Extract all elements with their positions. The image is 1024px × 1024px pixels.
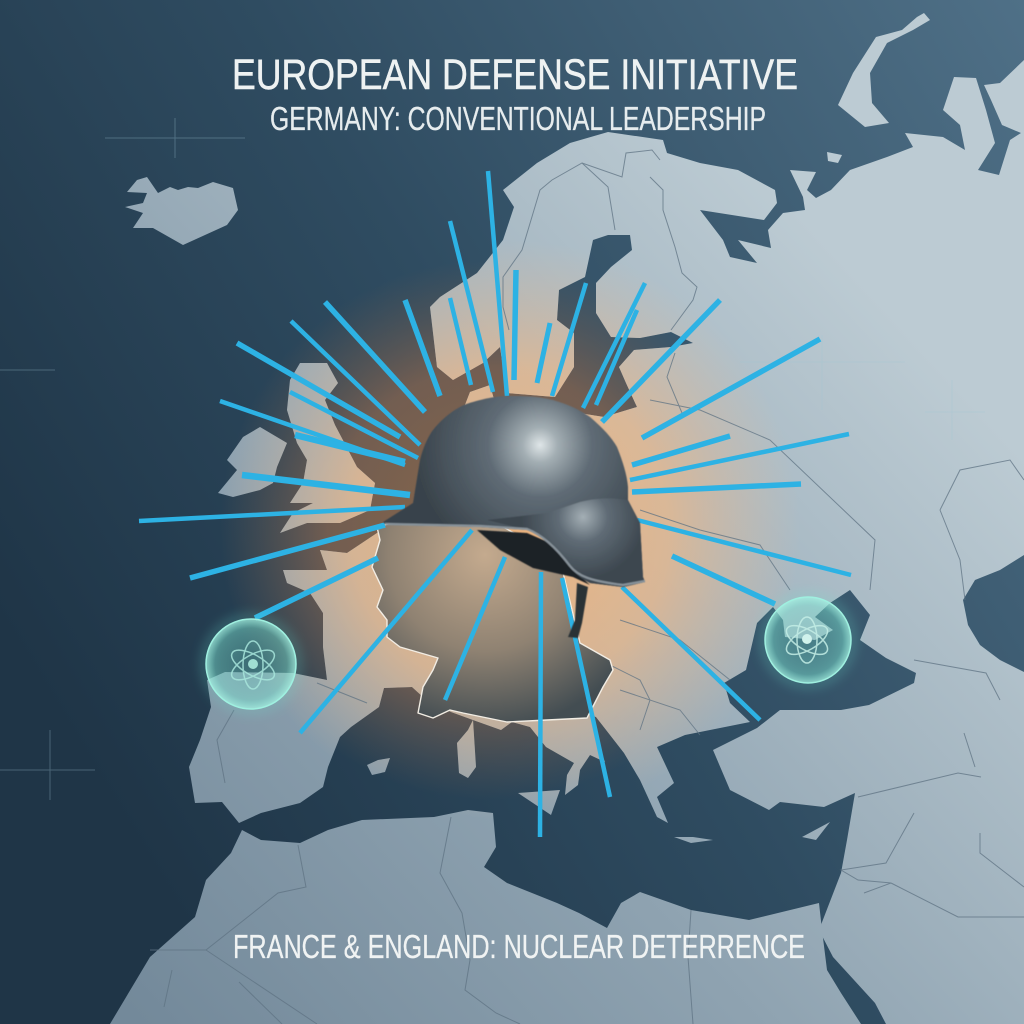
warm glow over the sea — [220, 260, 760, 800]
icon: nuclear orb east — [764, 596, 852, 684]
subtitle: GERMANY: CONVENTIONAL LEADERSHIP — [270, 100, 766, 137]
blue radiating lines — [139, 171, 851, 837]
country borders — [150, 150, 1024, 1024]
helmet inner shadow — [477, 530, 590, 585]
icon: nuclear orb west — [205, 618, 297, 710]
helmet brim highlight — [385, 524, 645, 585]
decorative crosshair marks — [0, 118, 985, 800]
helmet strap — [568, 583, 588, 638]
bottom caption: FRANCE & ENGLAND: NUCLEAR DETERRENCE — [233, 928, 805, 965]
title: EUROPEAN DEFENSE INITIATIVE — [232, 51, 798, 99]
helmet neck guard — [487, 498, 645, 587]
Germany highlighted silhouette — [372, 515, 613, 722]
icon: steel helmet — [383, 396, 645, 638]
helmet dome and brim — [383, 396, 645, 587]
